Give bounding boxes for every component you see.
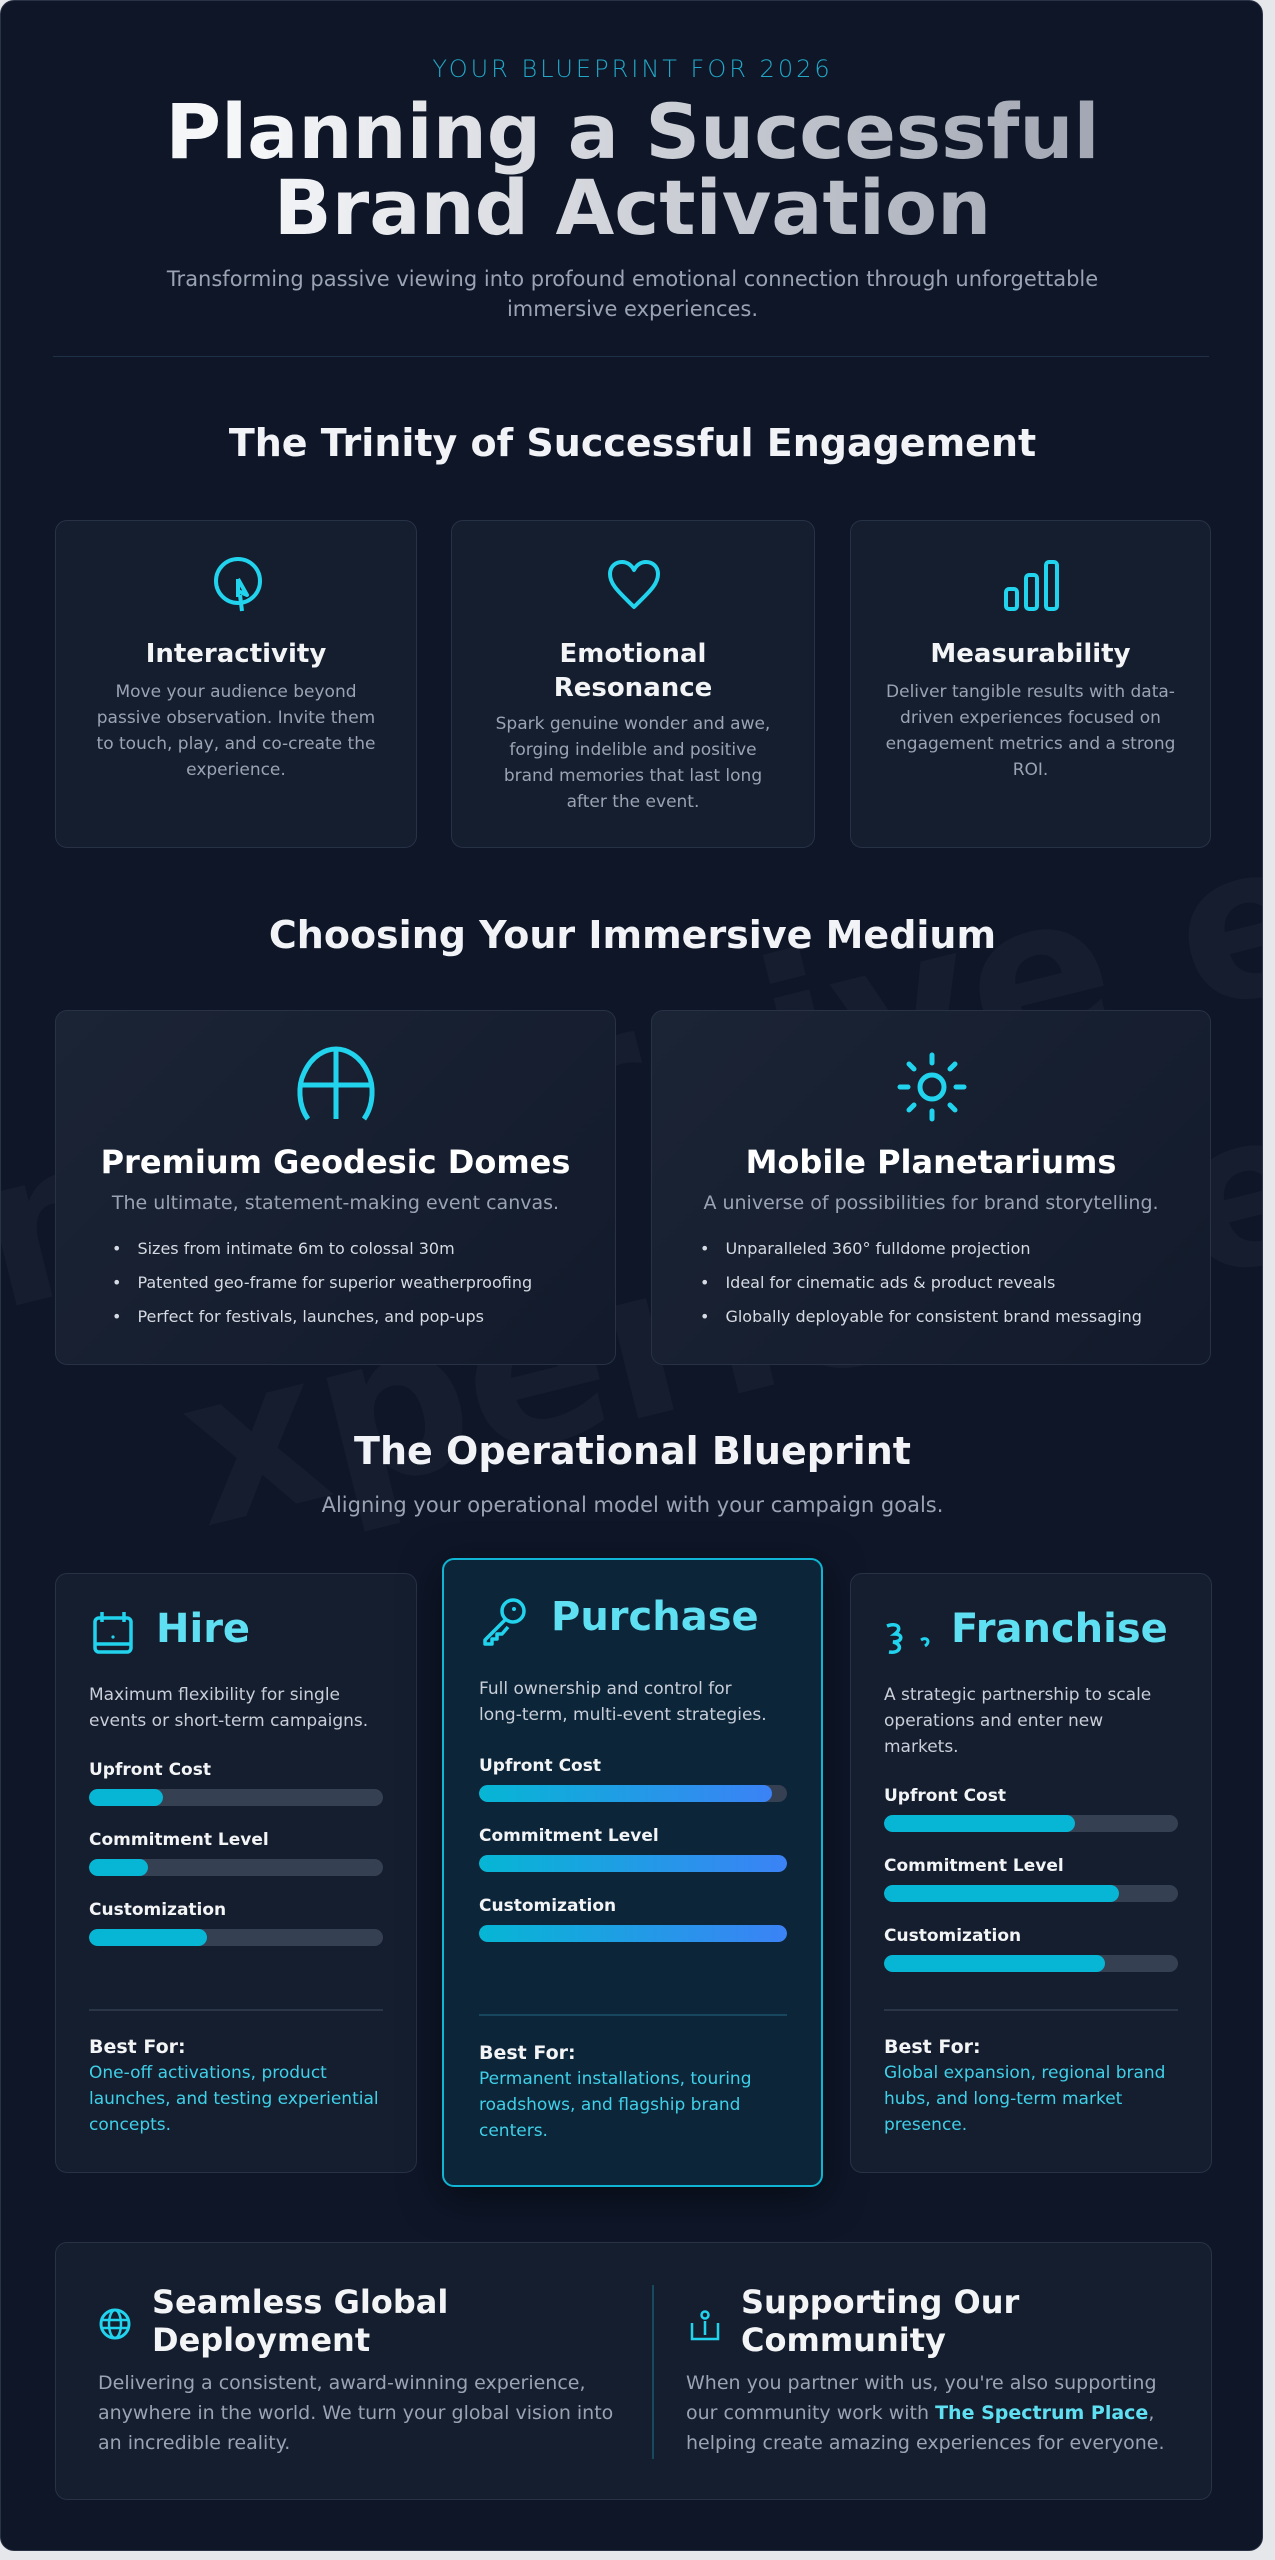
- text: [479, 1679, 767, 1725]
- title: Purchase: [551, 1594, 759, 1640]
- title: Planning a Successful: [165, 87, 1100, 176]
- panel: domes: [55, 1010, 616, 1365]
- bars: Customization: [89, 1900, 226, 1920]
- icon: sun: [898, 1052, 966, 1122]
- bars: [479, 1756, 787, 1942]
- title: [1, 94, 1264, 246]
- title: Emotional: [560, 639, 706, 669]
- text: long-term, multi-event strategies.: [479, 1705, 767, 1725]
- bars: [884, 1786, 1178, 1972]
- icon: key: [483, 1598, 526, 1646]
- icon: handshake: [886, 1623, 930, 1654]
- text: Maximum flexibility for single events or short-term campaigns.: [89, 1685, 368, 1731]
- best for: Best For:: [884, 2036, 981, 2058]
- bars: Upfront Cost: [884, 1786, 1006, 1806]
- bars: Customization: [884, 1926, 1021, 1946]
- bullet list: Patented geo-frame for superior weatherproofing: [137, 1273, 532, 1292]
- heading: Community: [741, 2321, 946, 2359]
- heading: trinity: The Trinity of Successful Engagement: [229, 421, 1036, 465]
- heading: Deployment: [152, 2321, 370, 2359]
- text: When you partner with us, you're also supporting our community work with The Spectrum Place, helping create amazing experiences for everyone.: [686, 2372, 1165, 2454]
- heading: medium: Choosing Your Immersive Medium: [269, 913, 996, 957]
- subheading: Aligning your operational model with your campaign goals.: [322, 1493, 943, 1517]
- title: Resonance: [554, 673, 712, 703]
- panel: emotional resonance: [451, 520, 815, 848]
- panel: measurability: [850, 520, 1211, 848]
- heading: [741, 2283, 1020, 2359]
- icon: dome: [297, 1046, 375, 1120]
- bars: Commitment Level: [884, 1856, 1064, 1876]
- bullet list: [702, 1239, 1142, 1326]
- bullet list: Sizes from intimate 6m to colossal 30m: [137, 1239, 455, 1258]
- bars: Upfront Cost: [479, 1756, 601, 1776]
- title: [554, 639, 712, 703]
- text: Delivering a consistent, award-winning experience, anywhere in the world. We turn your global vision into an incredible reality.: [98, 2372, 613, 2454]
- panel: purchase: [442, 1558, 823, 2187]
- best for: One-off activations, product launches, and testing experiential concepts.: [89, 2063, 379, 2135]
- bullet list: [114, 1239, 532, 1326]
- bullet list: Perfect for festivals, launches, and pop-ups: [137, 1307, 484, 1326]
- icon: calendar: [93, 1612, 133, 1654]
- best for: Best For:: [89, 2036, 186, 2058]
- bullet list: Globally deployable for consistent brand messaging: [725, 1307, 1142, 1326]
- icon: community: [690, 2310, 720, 2340]
- bullet list: Unparalleled 360° fulldome projection: [725, 1239, 1031, 1258]
- icon: bar chart: [1004, 560, 1059, 611]
- panel: hire: [55, 1573, 417, 2173]
- best for: Best For:: [479, 2042, 576, 2064]
- bars: Customization: [479, 1896, 616, 1916]
- heading: Supporting Our: [741, 2283, 1019, 2321]
- best for: Global expansion, regional brand hubs, and long-term market presence.: [884, 2063, 1165, 2135]
- panel: bottom: [55, 2242, 1212, 2500]
- bullet list: Ideal for cinematic ads & product reveals: [725, 1273, 1055, 1292]
- title: Premium Geodesic Domes: [101, 1143, 570, 1181]
- subtitle: The ultimate, statement-making event canvas.: [112, 1192, 559, 1214]
- icon: cursor: [214, 557, 262, 612]
- title: Interactivity: [146, 639, 326, 669]
- text: Deliver tangible results with data-driven experiences focused on engagement metrics and a strong ROI.: [886, 682, 1175, 780]
- panel: planetariums: [651, 1010, 1211, 1365]
- tagline: Transforming passive viewing into profound emotional connection through unforgettable immersive experiences.: [167, 267, 1098, 321]
- text: A strategic partnership to scale operations and enter new markets.: [884, 1685, 1151, 1757]
- bars: [89, 1760, 383, 1946]
- title: Franchise: [951, 1606, 1168, 1652]
- title: Brand Activation: [274, 163, 991, 252]
- text: Spark genuine wonder and awe, forging indelible and positive brand memories that last long after the event.: [496, 714, 770, 812]
- icon: globe: [100, 2308, 130, 2340]
- icon: heart: [608, 560, 660, 610]
- heading: operational: The Operational Blueprint: [354, 1429, 911, 1473]
- watermark: [0, 720, 1275, 1636]
- bars: Commitment Level: [479, 1826, 659, 1846]
- heading: [152, 2283, 448, 2359]
- bars: Upfront Cost: [89, 1760, 211, 1780]
- title: Mobile Planetariums: [746, 1143, 1116, 1181]
- bars: Commitment Level: [89, 1830, 269, 1850]
- text: Full ownership and control for: [479, 1679, 732, 1699]
- title: Measurability: [930, 639, 1131, 669]
- panel: interactivity: [55, 520, 417, 848]
- subtitle: A universe of possibilities for brand storytelling.: [703, 1192, 1159, 1214]
- eyebrow: YOUR BLUEPRINT FOR 2026: [432, 55, 833, 83]
- panel: franchise: [850, 1573, 1212, 2173]
- text: Move your audience beyond passive observation. Invite them to touch, play, and co-create the experience.: [97, 682, 375, 780]
- title: Hire: [156, 1606, 250, 1652]
- heading: Seamless Global: [152, 2283, 448, 2321]
- best for: Permanent installations, touring roadshows, and flagship brand centers.: [479, 2069, 752, 2141]
